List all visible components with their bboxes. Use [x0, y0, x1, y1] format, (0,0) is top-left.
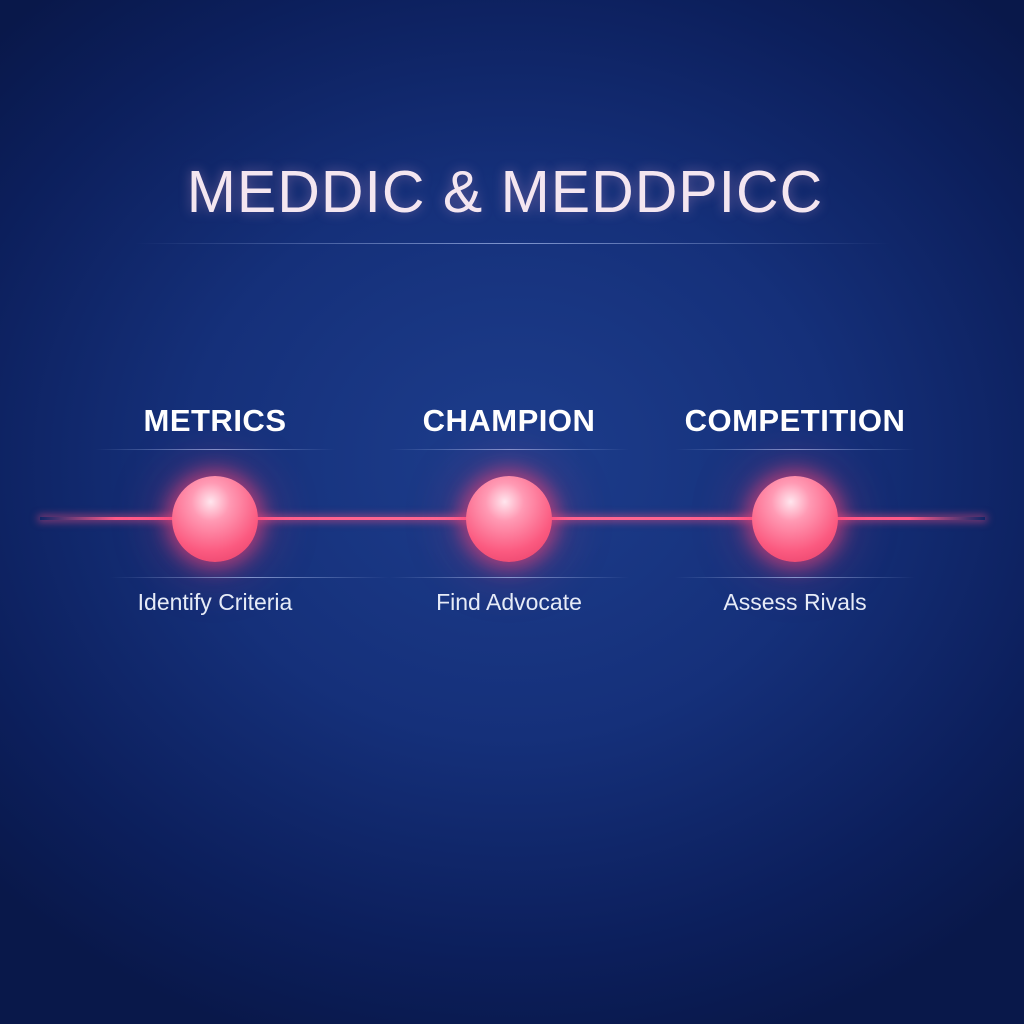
step: competition [684, 403, 906, 615]
text: identify criteria: Identify Criteria [138, 589, 292, 615]
heading: champion: CHAMPION [423, 403, 595, 438]
icon: sphere competition [752, 476, 838, 562]
title: MEDDIC & MEDDPICC [187, 159, 823, 225]
text: assess rivals: Assess Rivals [723, 589, 867, 615]
timeline line [40, 517, 985, 520]
heading: metrics: METRICS [144, 403, 286, 438]
heading: competition: COMPETITION [685, 403, 905, 438]
text: find advocate: Find Advocate [436, 589, 582, 615]
step: champion [398, 403, 619, 615]
icon: sphere metrics [172, 476, 258, 562]
icon: sphere champion [466, 476, 552, 562]
step: metrics [104, 403, 379, 615]
